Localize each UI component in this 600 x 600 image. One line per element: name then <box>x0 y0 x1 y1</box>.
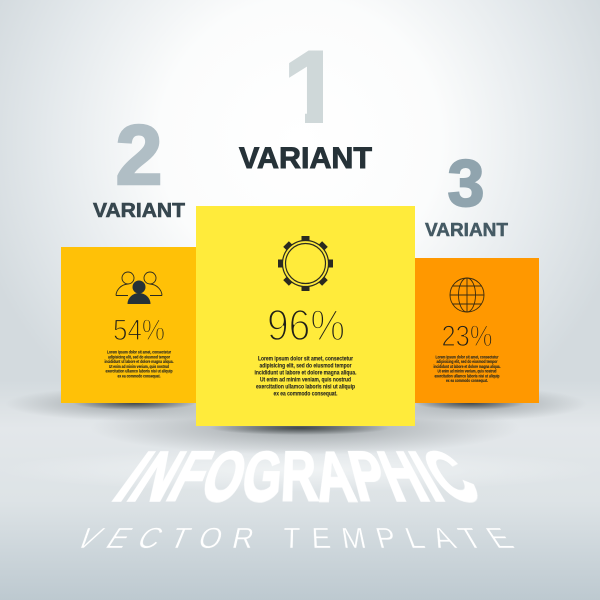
text block: left: Lorem ipsum dolor sit amet, consectetur <box>107 350 171 354</box>
stat: 23%: 23% <box>442 320 492 353</box>
text block: center: adipisicing elit, sed do eiusmod tempor <box>260 362 352 370</box>
text block: right: adipisicing elit, sed do eiusmod tempor <box>436 359 498 364</box>
text block: center: Ut enim ad minim veniam, quis nostrud <box>260 376 351 384</box>
icon: gear <box>278 236 333 291</box>
text block: center: ex ea commodo consequat. <box>274 390 338 398</box>
stat: 96%: 96% <box>267 301 345 350</box>
text block: center <box>254 356 357 398</box>
panel: right card <box>415 258 539 403</box>
icon: globe <box>450 278 484 312</box>
text block: right <box>434 354 500 383</box>
panel: center card <box>196 206 415 426</box>
heading: variant 3: VARIANT <box>425 220 508 240</box>
title: infographic: INFOGRAPHIC <box>95 441 501 521</box>
text block: left: ex ea commodo consequat. <box>118 374 160 378</box>
text block: center: incididunt ut labore et dolore magna aliqua. <box>254 370 357 376</box>
text block: left: incididunt ut labore et dolore magna aliqua. <box>104 359 174 364</box>
heading: variant 2: VARIANT <box>93 200 185 222</box>
stat: 54%: 54% <box>113 314 165 347</box>
text block: right: ex ea commodo consequat. <box>446 378 488 383</box>
text block: right: Ut enim ad minim veniam, quis nostrud <box>438 369 497 374</box>
number 1: 1 <box>283 28 343 149</box>
text block: center: Lorem ipsum dolor sit amet, consectetur <box>258 356 353 362</box>
text block: right: Lorem ipsum dolor sit amet, consectetur <box>436 354 499 360</box>
shadow: center card <box>90 401 520 455</box>
text block: left: Ut enim ad minim veniam, quis nostrud <box>109 364 169 369</box>
subtitle: vector template: VECTOR TEMPLATE <box>67 521 533 555</box>
icon: people <box>116 272 162 304</box>
shadow: right card <box>363 387 587 421</box>
text block: center: exercitation ullamco laboris nisi ut aliquip <box>256 384 355 390</box>
text block: left <box>104 350 174 378</box>
number 2: 2 <box>116 108 162 202</box>
heading: variant 1: VARIANT <box>239 142 372 175</box>
text block: left: adipisicing elit, sed do eiusmod tempor <box>108 354 170 359</box>
shadow: left card <box>5 387 255 421</box>
panel: left card <box>61 247 197 403</box>
text block: right: incididunt ut labore et dolore magna aliqua. <box>434 364 500 369</box>
text block: right: exercitation ullamco laboris nisi ut aliquip <box>434 373 500 378</box>
text block: left: exercitation ullamco laboris nisi ut aliquip <box>106 369 173 374</box>
number 3: 3 <box>448 146 484 220</box>
